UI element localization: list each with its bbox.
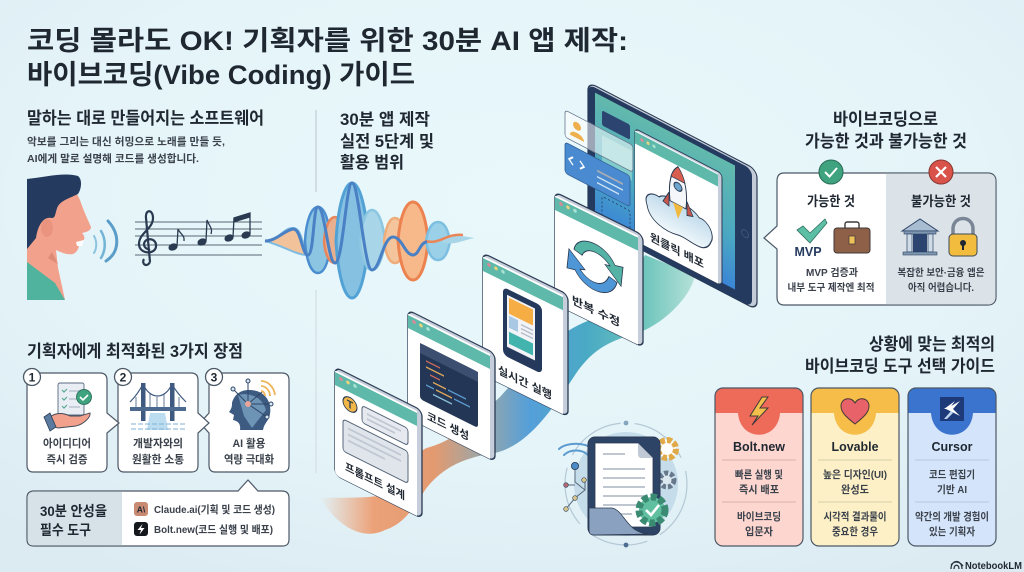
panel: Lovable: 높은 디자인(UI): [823, 468, 887, 481]
icon: bridge: [130, 383, 186, 430]
heading: five steps: 실전 5단계 및: [340, 132, 434, 151]
inner window: one-click deploy: [635, 128, 722, 286]
icon: MVP check: MVP: [794, 245, 822, 259]
panel: Bolt.new: 입문자: [745, 525, 773, 538]
panel: Bolt.new: 바이브코딩: [737, 510, 781, 523]
tool: Claude: [134, 502, 275, 516]
icon: lightning: [750, 397, 768, 425]
can: description: 내부 도구 제작엔 최적: [788, 281, 874, 294]
heading: tool guide: [805, 335, 995, 376]
panel: Lovable: Lovable: [832, 440, 879, 454]
label: 즉시 검증: [46, 453, 88, 466]
heading: five steps: 활용 범위: [340, 153, 404, 172]
panel: Cursor: 약간의 개발 경험이: [915, 510, 989, 523]
number badge 3: 3: [211, 370, 218, 384]
icon: smartphone: [503, 287, 542, 374]
text block: humming analogy: [27, 135, 225, 165]
panel: Lovable: 시각적 결과물이: [824, 510, 886, 523]
label: essential tools heading: 필수 도구: [40, 522, 91, 538]
cannot: description: 아직 어렵습니다.: [908, 281, 974, 294]
panel: Cursor: 있는 기획자: [929, 525, 975, 538]
label: 아이디디어: [43, 437, 91, 450]
floating profile card: [565, 110, 633, 172]
icon: briefcase: [834, 222, 870, 253]
cannot: description: 복잡한 보안·금융 앱은: [898, 266, 984, 279]
step 2: code generation card: 코드 생성: [427, 410, 469, 443]
heading: five steps: [340, 110, 434, 172]
panel: advantage 3: [200, 368, 289, 472]
icon: bank: [902, 219, 938, 255]
can: description: [788, 266, 874, 294]
heading: five steps: 30분 앱 제작: [340, 110, 430, 129]
heading: software by speech: 말하는 대로 만들어지는 소프트웨어: [27, 109, 264, 128]
step 1: prompt design card: [335, 367, 422, 518]
panel: Bolt.new: 빠른 실행 및: [735, 468, 783, 481]
title: 바이브코딩(Vibe Coding) 가이드: [27, 60, 415, 90]
icon: code editor: [420, 343, 478, 428]
flow ribbon: [320, 255, 695, 534]
icon: cursor logo: [940, 397, 964, 421]
panel: advantage 2: [114, 368, 209, 472]
label: 역량 극대화: [224, 452, 274, 466]
tool: Bolt: Bolt.new(코드 실행 및 배포): [154, 523, 273, 536]
can: description: MVP 검증과: [806, 266, 858, 279]
icon: T badge: [343, 394, 357, 415]
panel: Bolt.new: 즉시 배포: [739, 483, 779, 496]
panel: essential tools: [27, 480, 289, 546]
label: 원활한 소통: [132, 452, 184, 466]
can: badge: [819, 160, 843, 184]
icon: document with gears and network: [559, 421, 687, 547]
panel: Lovable: [811, 388, 899, 546]
heading: can and cannot: [805, 110, 967, 151]
step 3: live run card: 실시간 실행: [498, 363, 552, 403]
step 3: live run card: [483, 253, 568, 417]
label: [132, 437, 184, 466]
step 1: prompt design card: 프롬프트 설계: [345, 460, 405, 503]
heading: three advantages: 기획자에게 최적화된 3가지 장점: [27, 342, 243, 361]
panel: can and cannot: 가능한 것: [807, 194, 855, 209]
label: [224, 436, 274, 466]
cannot: description: [898, 266, 984, 294]
panel: Cursor: 기반 AI: [937, 483, 967, 496]
prompt input boxes: [343, 396, 408, 484]
title: 코딩 몰라도 OK! 기획자를 위한 30분 AI 앱 제작:: [27, 26, 628, 56]
label: 개발자와의: [133, 437, 183, 450]
icon: padlock: [949, 218, 977, 256]
number badge 1: 1: [29, 370, 36, 384]
tool: Bolt: [134, 522, 273, 536]
icon: speaking person: [27, 174, 91, 300]
icon: sound waves: [94, 221, 117, 261]
icon: checklist on hand: [44, 383, 92, 431]
number badge 2: 2: [120, 370, 127, 384]
text block: humming analogy: 악보를 그리는 대신 허밍으로 노래를 만들 듯,: [27, 135, 225, 148]
panel: Bolt.new: [715, 388, 803, 546]
tool: Claude: A\: [137, 504, 146, 514]
panel: can and cannot: 불가능한 것: [911, 194, 971, 209]
step 4: iterative edit card: 반복 수정: [572, 294, 620, 330]
label: essential tools heading: 30분 안성을: [40, 503, 107, 519]
panel: Cursor: [908, 388, 996, 546]
label: essential tools heading: [40, 503, 107, 538]
heading: can and cannot: 가능한 것과 불가능한 것: [805, 132, 967, 151]
chart: sound waveform: [265, 183, 475, 298]
text block: humming analogy: AI에게 말로 설명해 코드를 생성합니다.: [27, 152, 199, 165]
icon: MVP check: [794, 219, 827, 259]
icon: music staff with notes: [135, 211, 262, 265]
heading: tool guide: 바이브코딩 도구 선택 가이드: [805, 357, 995, 376]
panel: Cursor: Cursor: [932, 440, 973, 454]
panel: can and cannot: [764, 160, 996, 305]
icon: heart: [841, 399, 869, 424]
icon: rocket on cloud: [646, 150, 712, 254]
cannot: badge: [929, 160, 953, 184]
step 2: code generation card: [408, 310, 495, 462]
step 5: tablet one-click deploy: [588, 82, 757, 310]
heading: tool guide: 상황에 맞는 최적의: [869, 335, 995, 354]
step 4: iterative edit card: [555, 192, 643, 347]
panel: Lovable: 중요한 경우: [832, 525, 878, 538]
title: [27, 26, 628, 90]
floating code card: [565, 142, 630, 207]
label: AI 활용: [232, 436, 266, 450]
inner window: one-click deploy: 원클릭 배포: [650, 230, 704, 271]
heading: can and cannot: 바이브코딩으로: [833, 110, 938, 129]
panel: Lovable: 완성도: [841, 483, 869, 496]
icon: AI head: [229, 379, 275, 430]
label: [43, 437, 91, 466]
panel: Bolt.new: Bolt.new: [733, 440, 785, 454]
panel: advantage 1: [24, 368, 119, 472]
panel: Cursor: 코드 편집기: [929, 468, 975, 481]
tool: Claude: Claude.ai(기획 및 코드 생성): [154, 503, 275, 516]
icon: refresh arrows: [567, 230, 623, 304]
